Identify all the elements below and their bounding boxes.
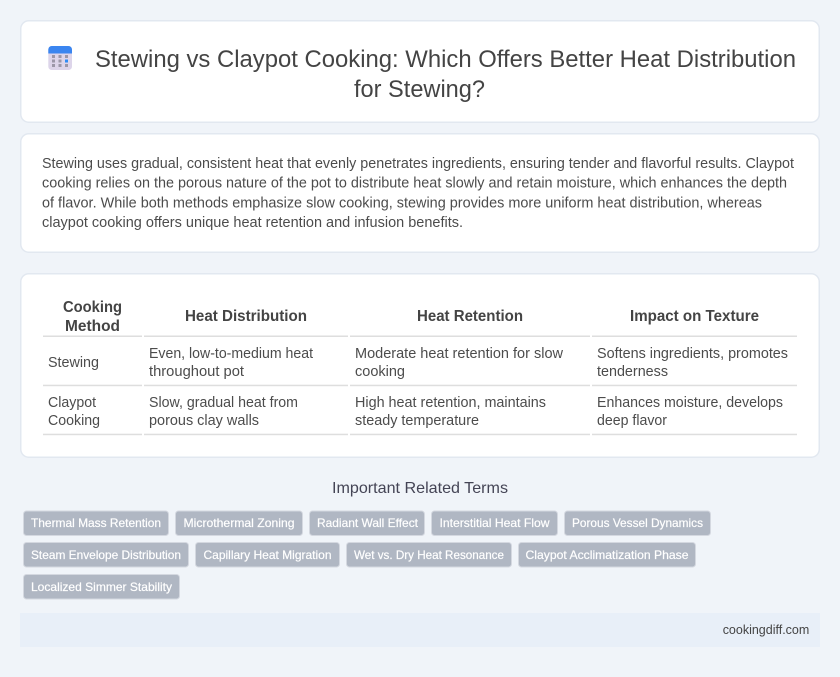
tag: porous vessel dynamics <box>564 511 710 536</box>
table header row: Heat Distribution <box>185 308 307 325</box>
tag: claypot acclimatization phase <box>518 542 696 567</box>
tag: microthermal zoning <box>176 511 302 536</box>
table row: stewing: Softens ingredients, promotes <box>597 346 788 362</box>
heading: important related terms: Important Related Terms <box>332 480 508 497</box>
title <box>95 46 796 103</box>
text block: summary: of flavor. While both methods emphasize slow cooking, stewing provides more uniform heat distribution, whereas <box>42 196 762 212</box>
table row: stewing: throughout pot <box>149 364 244 380</box>
table header row <box>63 299 759 335</box>
footer bar <box>20 613 820 647</box>
table header row: Cooking <box>63 299 122 316</box>
panel: comparison table <box>21 274 819 457</box>
icon: calendar <box>48 46 72 70</box>
panel: title header <box>21 21 819 122</box>
tag: claypot acclimatization phase: Claypot Acclimatization Phase <box>526 548 689 562</box>
text block: summary: claypot cooking offers unique heat retention and infusion benefits. <box>42 215 463 231</box>
tag: capillary heat migration: Capillary Heat Migration <box>204 548 332 562</box>
table row: claypot cooking <box>48 395 783 429</box>
footer source text: cookingdiff.com <box>723 622 809 637</box>
tag: wet vs. dry heat resonance: Wet vs. Dry Heat Resonance <box>354 548 504 562</box>
table row: stewing: Even, low-to-medium heat <box>149 346 313 362</box>
tag: localized simmer stability <box>24 574 180 599</box>
table row: stewing <box>48 346 788 380</box>
table row: claypot cooking: Slow, gradual heat from <box>149 395 298 411</box>
table row: claypot cooking: steady temperature <box>355 413 479 429</box>
tag: thermal mass retention: Thermal Mass Retention <box>31 516 161 530</box>
table header row: Method <box>65 318 120 335</box>
panel: summary paragraph <box>21 134 819 252</box>
tag list <box>24 511 710 599</box>
table row: claypot cooking: Enhances moisture, develops <box>597 395 783 411</box>
table row: stewing: Moderate heat retention for slow <box>355 346 564 362</box>
tag: steam envelope distribution: Steam Envelope Distribution <box>31 548 181 562</box>
tag: radiant wall effect: Radiant Wall Effect <box>317 516 419 530</box>
tag: interstitial heat flow: Interstitial Heat Flow <box>440 516 550 530</box>
table row: claypot cooking: High heat retention, maintains <box>355 395 546 411</box>
tag: porous vessel dynamics: Porous Vessel Dynamics <box>572 516 703 530</box>
tag: thermal mass retention <box>24 511 168 536</box>
table row: claypot cooking: deep flavor <box>597 413 667 429</box>
tag: radiant wall effect <box>310 511 424 536</box>
table header row: Impact on Texture <box>630 308 759 325</box>
text block: summary: Stewing uses gradual, consistent heat that evenly penetrates ingredients, ensuring tender and flavorful results. Claypot <box>42 156 794 172</box>
tag: wet vs. dry heat resonance <box>346 542 512 567</box>
tag: localized simmer stability: Localized Simmer Stability <box>31 580 172 594</box>
table row: claypot cooking: Cooking <box>48 413 100 429</box>
title: Stewing vs Claypot Cooking: Which Offers Better Heat Distribution <box>95 46 796 73</box>
title: for Stewing? <box>354 76 485 103</box>
table row: claypot cooking: porous clay walls <box>149 413 259 429</box>
table row: stewing: Stewing <box>48 355 99 371</box>
table row: stewing: cooking <box>355 364 405 380</box>
text block: summary <box>42 156 794 231</box>
tag: capillary heat migration <box>196 542 340 567</box>
table row: stewing: tenderness <box>597 364 668 380</box>
tag: microthermal zoning: Microthermal Zoning <box>184 516 294 530</box>
table header row: Heat Retention <box>417 308 523 325</box>
tag: steam envelope distribution <box>24 542 188 567</box>
text block: summary: cooking relies on the porous nature of the pot to distribute heat slowly and retain moisture, which enhances the depth <box>42 176 787 192</box>
table row: claypot cooking: Claypot <box>48 395 96 411</box>
tag: interstitial heat flow <box>432 511 558 536</box>
